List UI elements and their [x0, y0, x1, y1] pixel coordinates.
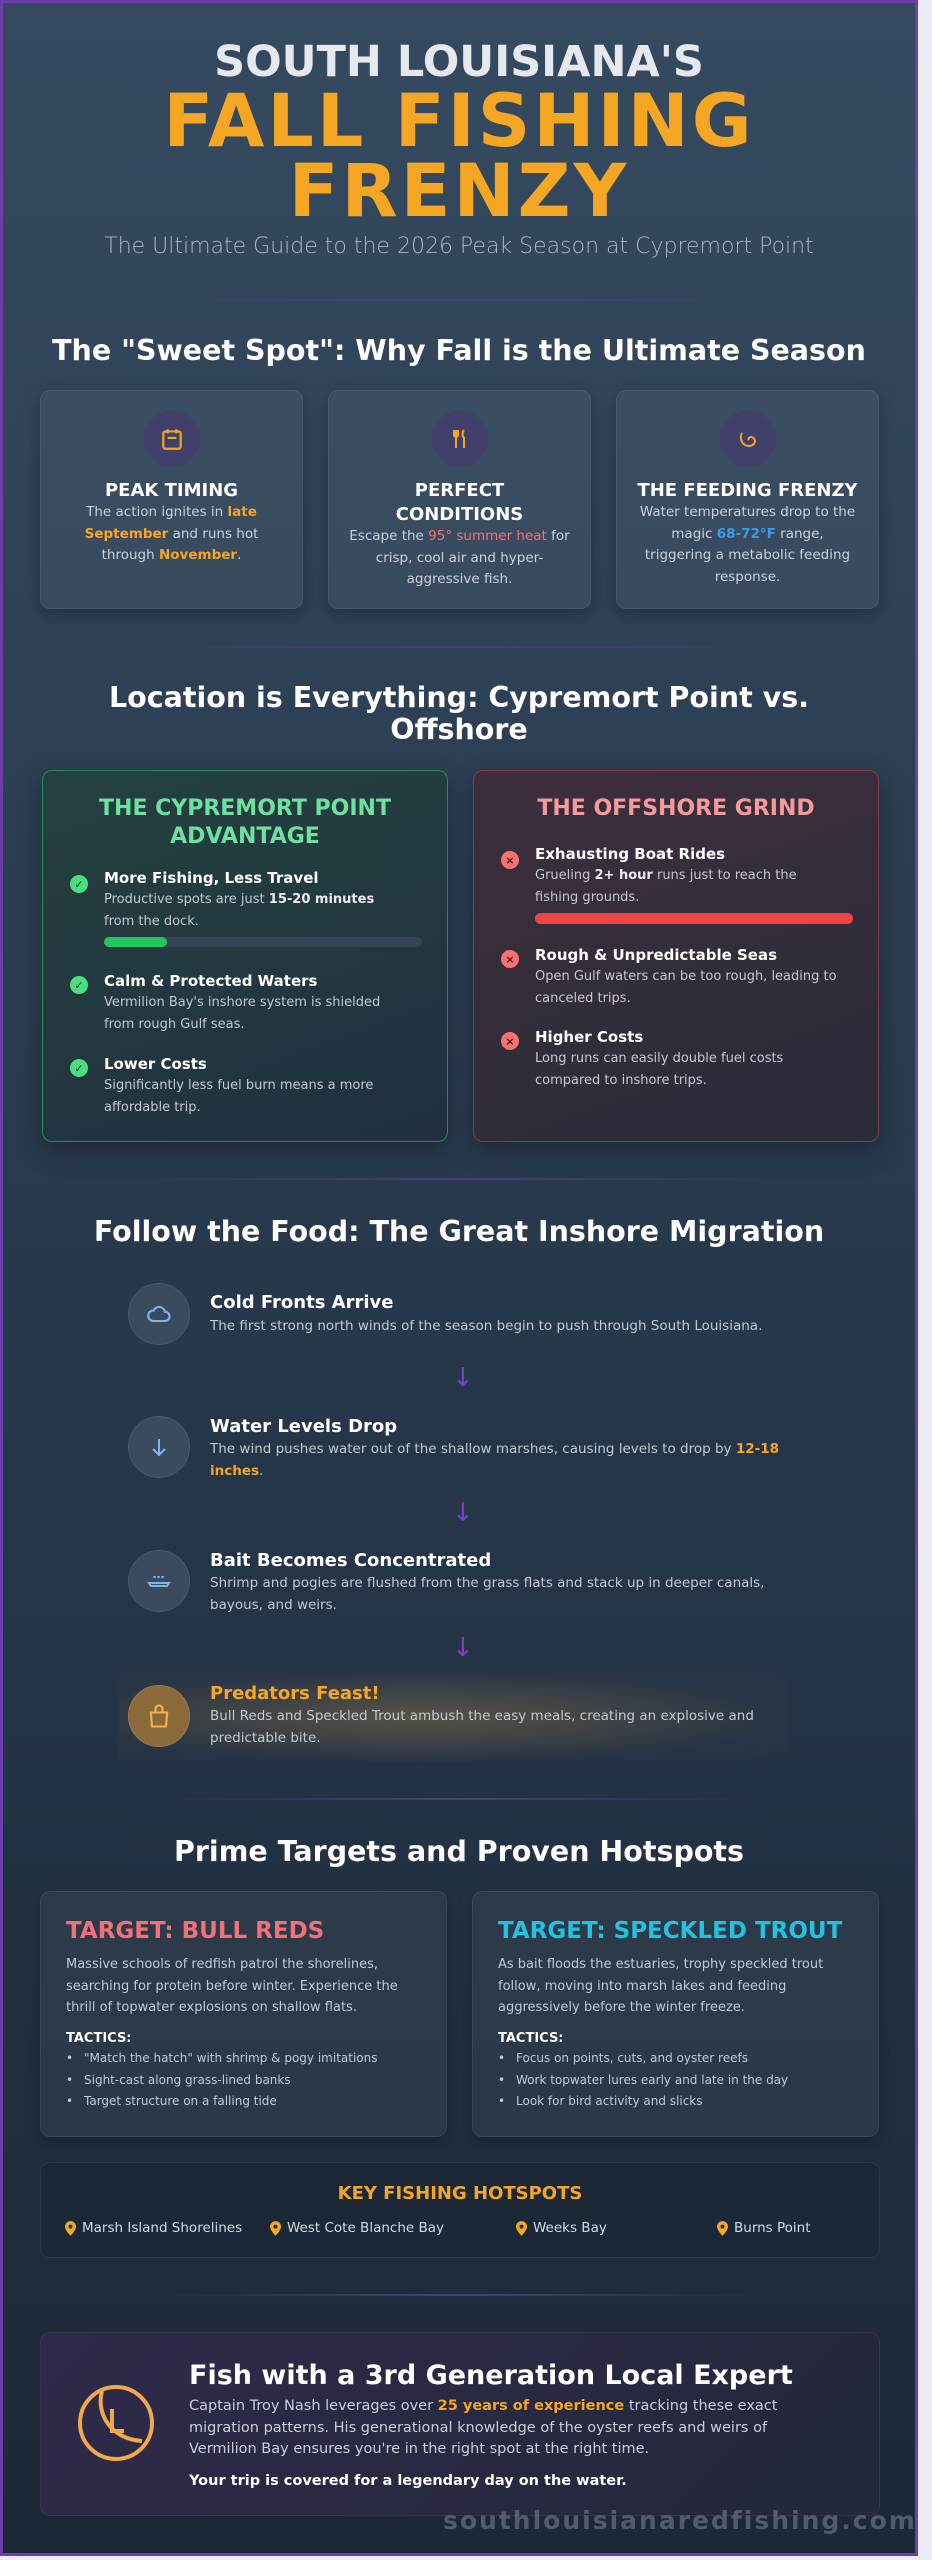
- step: cold fronts: [128, 1283, 762, 1345]
- card: perfect conditions: Escape the 95° summer heat for crisp, cool air and hyper-aggressive fish.: [349, 528, 570, 587]
- arrow: ↓: [452, 1498, 474, 1528]
- card: peak timing: PEAK TIMING: [105, 480, 238, 501]
- arrow: ↓: [452, 1633, 474, 1663]
- card: bull reds: Sight-cast along grass-lined banks: [84, 2072, 291, 2086]
- arrow: ↓: [452, 1363, 474, 1393]
- card: perfect conditions: [328, 390, 591, 609]
- heading: sweet spot: The "Sweet Spot": Why Fall is the Ultimate Season: [52, 334, 866, 367]
- item: lower costs: Lower Costs: [104, 1055, 207, 1073]
- panel: offshore grind: [473, 770, 879, 1142]
- item: rough seas: Rough & Unpredictable Seas: [535, 946, 777, 964]
- item: lower costs: [70, 1055, 373, 1114]
- card: bull reds: TARGET: BULL REDS: [66, 1918, 324, 1944]
- item: boat rides: ×: [505, 854, 515, 866]
- item: more fishing: Productive spots are just 15-20 minutes from the dock.: [104, 892, 374, 928]
- card: speckled trout: Look for bird activity and slicks: [516, 2094, 702, 2108]
- icon: clock/moon: [78, 2385, 154, 2461]
- heading: migration: Follow the Food: The Great Inshore Migration: [94, 1215, 824, 1248]
- title: FRENZY: [289, 149, 629, 234]
- item: rough seas: Open Gulf waters can be too rough, leading to canceled trips.: [535, 969, 837, 1006]
- step: cold fronts: Cold Fronts Arrive: [210, 1292, 393, 1313]
- card: speckled trout: Work topwater lures early and late in the day: [516, 2072, 788, 2086]
- card: bull reds: TACTICS:: [66, 2031, 132, 2046]
- step: water drop: Water Levels Drop: [210, 1416, 397, 1437]
- panel: cypremort advantage: THE CYPREMORT POINT: [99, 796, 391, 821]
- watermark: southlouisianaredfishing.com: [443, 2506, 917, 2535]
- item: higher costs: Long runs can easily double fuel costs compared to inshore trips.: [535, 1051, 783, 1088]
- hotspot list: Weeks Bay: [533, 2220, 607, 2236]
- step: water drop: [128, 1416, 779, 1478]
- card: peak timing: [40, 390, 303, 609]
- card: speckled trout: As bait floods the estuaries, trophy speckled trout follow, moving into marsh lakes and feeding aggressively before the winter freeze.: [498, 1957, 823, 2015]
- item: boat rides: [501, 845, 853, 924]
- item: more fishing: ✓: [74, 878, 84, 890]
- step: water drop: The wind pushes water out of the shallow marshes, causing levels to drop by 12-18 inches.: [210, 1441, 779, 1478]
- callout: local expert: Fish with a 3rd Generation Local Expert: [189, 2360, 793, 2391]
- item: lower costs: Significantly less fuel burn means a more affordable trip.: [104, 1078, 373, 1114]
- title: [163, 37, 755, 234]
- item: higher costs: ×: [505, 1034, 515, 1048]
- item: lower costs: ✓: [74, 1062, 84, 1074]
- step: bait: Shrimp and pogies are flushed from the grass flats and stack up in deeper canals, bayous, and weirs.: [210, 1575, 764, 1612]
- item: higher costs: [501, 1028, 783, 1088]
- item: boat rides: Grueling 2+ hour runs just to reach the fishing grounds.: [535, 868, 797, 904]
- card: peak timing: The action ignites in late September and runs hot through November.: [85, 504, 258, 563]
- item: more fishing: [70, 869, 422, 947]
- card: speckled trout: Focus on points, cuts, and oyster reefs: [516, 2051, 748, 2065]
- step: cold fronts: The first strong north winds of the season begin to push through South Louisiana.: [210, 1318, 762, 1334]
- step: bait: [128, 1550, 764, 1612]
- icon: calendar: [144, 411, 200, 467]
- card: speckled trout: TACTICS:: [498, 2031, 564, 2046]
- card: bull reds: "Match the hatch" with shrimp & pogy imitations: [84, 2051, 378, 2065]
- card: bull reds: [40, 1891, 447, 2137]
- item: calm waters: [70, 972, 380, 1032]
- hotspot list: West Cote Blanche Bay: [287, 2220, 444, 2236]
- panel: cypremort advantage: [42, 770, 448, 1142]
- item: calm waters: Calm & Protected Waters: [104, 972, 317, 990]
- panel: key hotspots: [40, 2162, 880, 2258]
- card: bull reds: Target structure on a falling tide: [84, 2094, 277, 2108]
- icon: swirl: [720, 411, 776, 467]
- item: higher costs: Higher Costs: [535, 1028, 643, 1046]
- card: speckled trout: [472, 1891, 879, 2137]
- item: rough seas: [501, 946, 837, 1006]
- step: predators feast: Predators Feast!: [210, 1683, 380, 1704]
- callout: local expert: [40, 2332, 880, 2516]
- card: feeding frenzy: THE FEEDING FRENZY: [637, 480, 858, 501]
- subtitle: The Ultimate Guide to the 2026 Peak Season at Cypremort Point: [104, 234, 814, 259]
- card: feeding frenzy: [616, 390, 879, 609]
- item: calm waters: Vermilion Bay's inshore system is shielded from rough Gulf seas.: [104, 995, 380, 1032]
- callout: local expert: Your trip is covered for a legendary day on the water.: [189, 2473, 627, 2489]
- heading: targets: Prime Targets and Proven Hotspots: [174, 1835, 744, 1868]
- item: more fishing: More Fishing, Less Travel: [104, 869, 319, 887]
- item: rough seas: ×: [505, 952, 515, 966]
- icon: utensils: [432, 411, 488, 467]
- panel: cypremort advantage: ADVANTAGE: [170, 824, 320, 849]
- hotspot list: Burns Point: [734, 2220, 811, 2236]
- item: boat rides: Exhausting Boat Rides: [535, 845, 725, 863]
- title: FALL FISHING: [163, 79, 755, 164]
- hotspot list: [65, 2220, 811, 2236]
- panel: key hotspots: KEY FISHING HOTSPOTS: [338, 2183, 582, 2204]
- panel: offshore grind: THE OFFSHORE GRIND: [537, 796, 815, 821]
- card: perfect conditions: CONDITIONS: [396, 504, 523, 525]
- card: speckled trout: TARGET: SPECKLED TROUT: [498, 1918, 842, 1944]
- title: SOUTH LOUISIANA'S: [214, 37, 704, 87]
- step: predators feast: [118, 1671, 788, 1762]
- card: feeding frenzy: Water temperatures drop to the magic 68-72°F range, triggering a metabolic feeding response.: [640, 504, 855, 584]
- hotspot list: Marsh Island Shorelines: [82, 2220, 242, 2236]
- card: bull reds: Massive schools of redfish patrol the shorelines, searching for protein before winter. Experience the thrill of topwater explosions on shallow flats.: [66, 1957, 398, 2015]
- callout: local expert: Captain Troy Nash leverages over 25 years of experience tracking these exact migration patterns. His generational knowledge of the oyster reefs and weirs of Vermilion Bay ensures you're in the right spot at the right time.: [189, 2398, 777, 2457]
- card: perfect conditions: PERFECT: [415, 480, 504, 501]
- heading: location: Location is Everything: Cypremort Point vs. Offshore: [109, 681, 809, 746]
- step: bait: Bait Becomes Concentrated: [210, 1550, 491, 1571]
- item: calm waters: ✓: [74, 978, 84, 992]
- step: predators feast: Bull Reds and Speckled Trout ambush the easy meals, creating an explosive and predictable bite.: [210, 1708, 754, 1746]
